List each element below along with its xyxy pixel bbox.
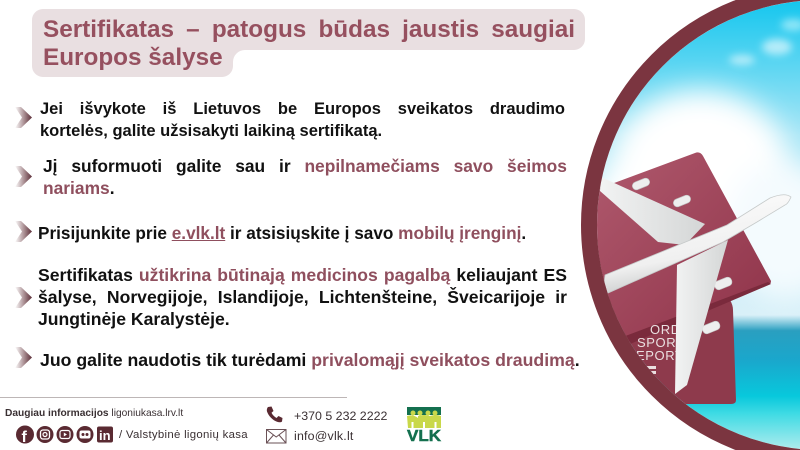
text block 2 [43, 156, 567, 198]
plane fuselage [604, 195, 791, 293]
footer info: Daugiau informacijos ligoniukasa.lrv.lt [5, 408, 183, 419]
text block 4: šalyse, Norvegijoje, Islandijoje, Lichtenšteine, Šveicarijoje ir [38, 287, 567, 307]
passport upper [590, 152, 771, 342]
icon: phone [266, 406, 282, 422]
passport lower [590, 235, 736, 404]
text block 2: nariams. [43, 178, 115, 198]
passport lettering: EPORT [636, 348, 684, 363]
title: Sertifikatas – patogus būdas jaustis saugiai [43, 16, 575, 43]
chevron bullets [16, 107, 32, 368]
social handle: / Valstybinė ligonių kasa [119, 429, 248, 441]
text block 4: Jungtinėje Karalystėje. [38, 309, 230, 329]
social icons: in [99, 428, 111, 443]
footer line [0, 397, 347, 398]
text block 2: Jį suformuoti galite sau ir nepilnamečiams savo šeimos [43, 156, 567, 176]
logo: VLK [406, 407, 442, 442]
text block 1: kortelės, galite užsisakyti laikiną sertifikatą. [40, 122, 382, 140]
social icons [16, 426, 113, 445]
icon: envelope [266, 429, 286, 444]
photo circle with passports and plane [581, 0, 800, 450]
title: Europos šalyse [43, 44, 223, 71]
ring [589, 0, 800, 450]
text block 1: Jei išvykote iš Lietuvos be Europos sveikatos draudimo [40, 100, 565, 118]
passport lettering: SPORT [637, 335, 685, 350]
text block 3: Prisijunkite prie e.vlk.lt ir atsisiųskite į savo mobilų įrenginį. [38, 223, 526, 243]
text block 4: Sertifikatas užtikrina būtinają medicinos pagalbą keliaujant ES [38, 265, 567, 285]
email: info@vlk.lt [294, 429, 354, 443]
phone number: +370 5 232 2222 [294, 409, 387, 423]
plane engines [631, 177, 733, 335]
title [32, 9, 585, 77]
passport lettering [637, 325, 676, 360]
plane wings [600, 177, 705, 245]
text block 5: Juo galite naudotis tik turėdami privalomąjį sveikatos draudimą. [40, 350, 580, 370]
text block 4 [38, 265, 567, 329]
text block 1 [40, 100, 565, 140]
passport lettering: ORD [650, 322, 681, 337]
